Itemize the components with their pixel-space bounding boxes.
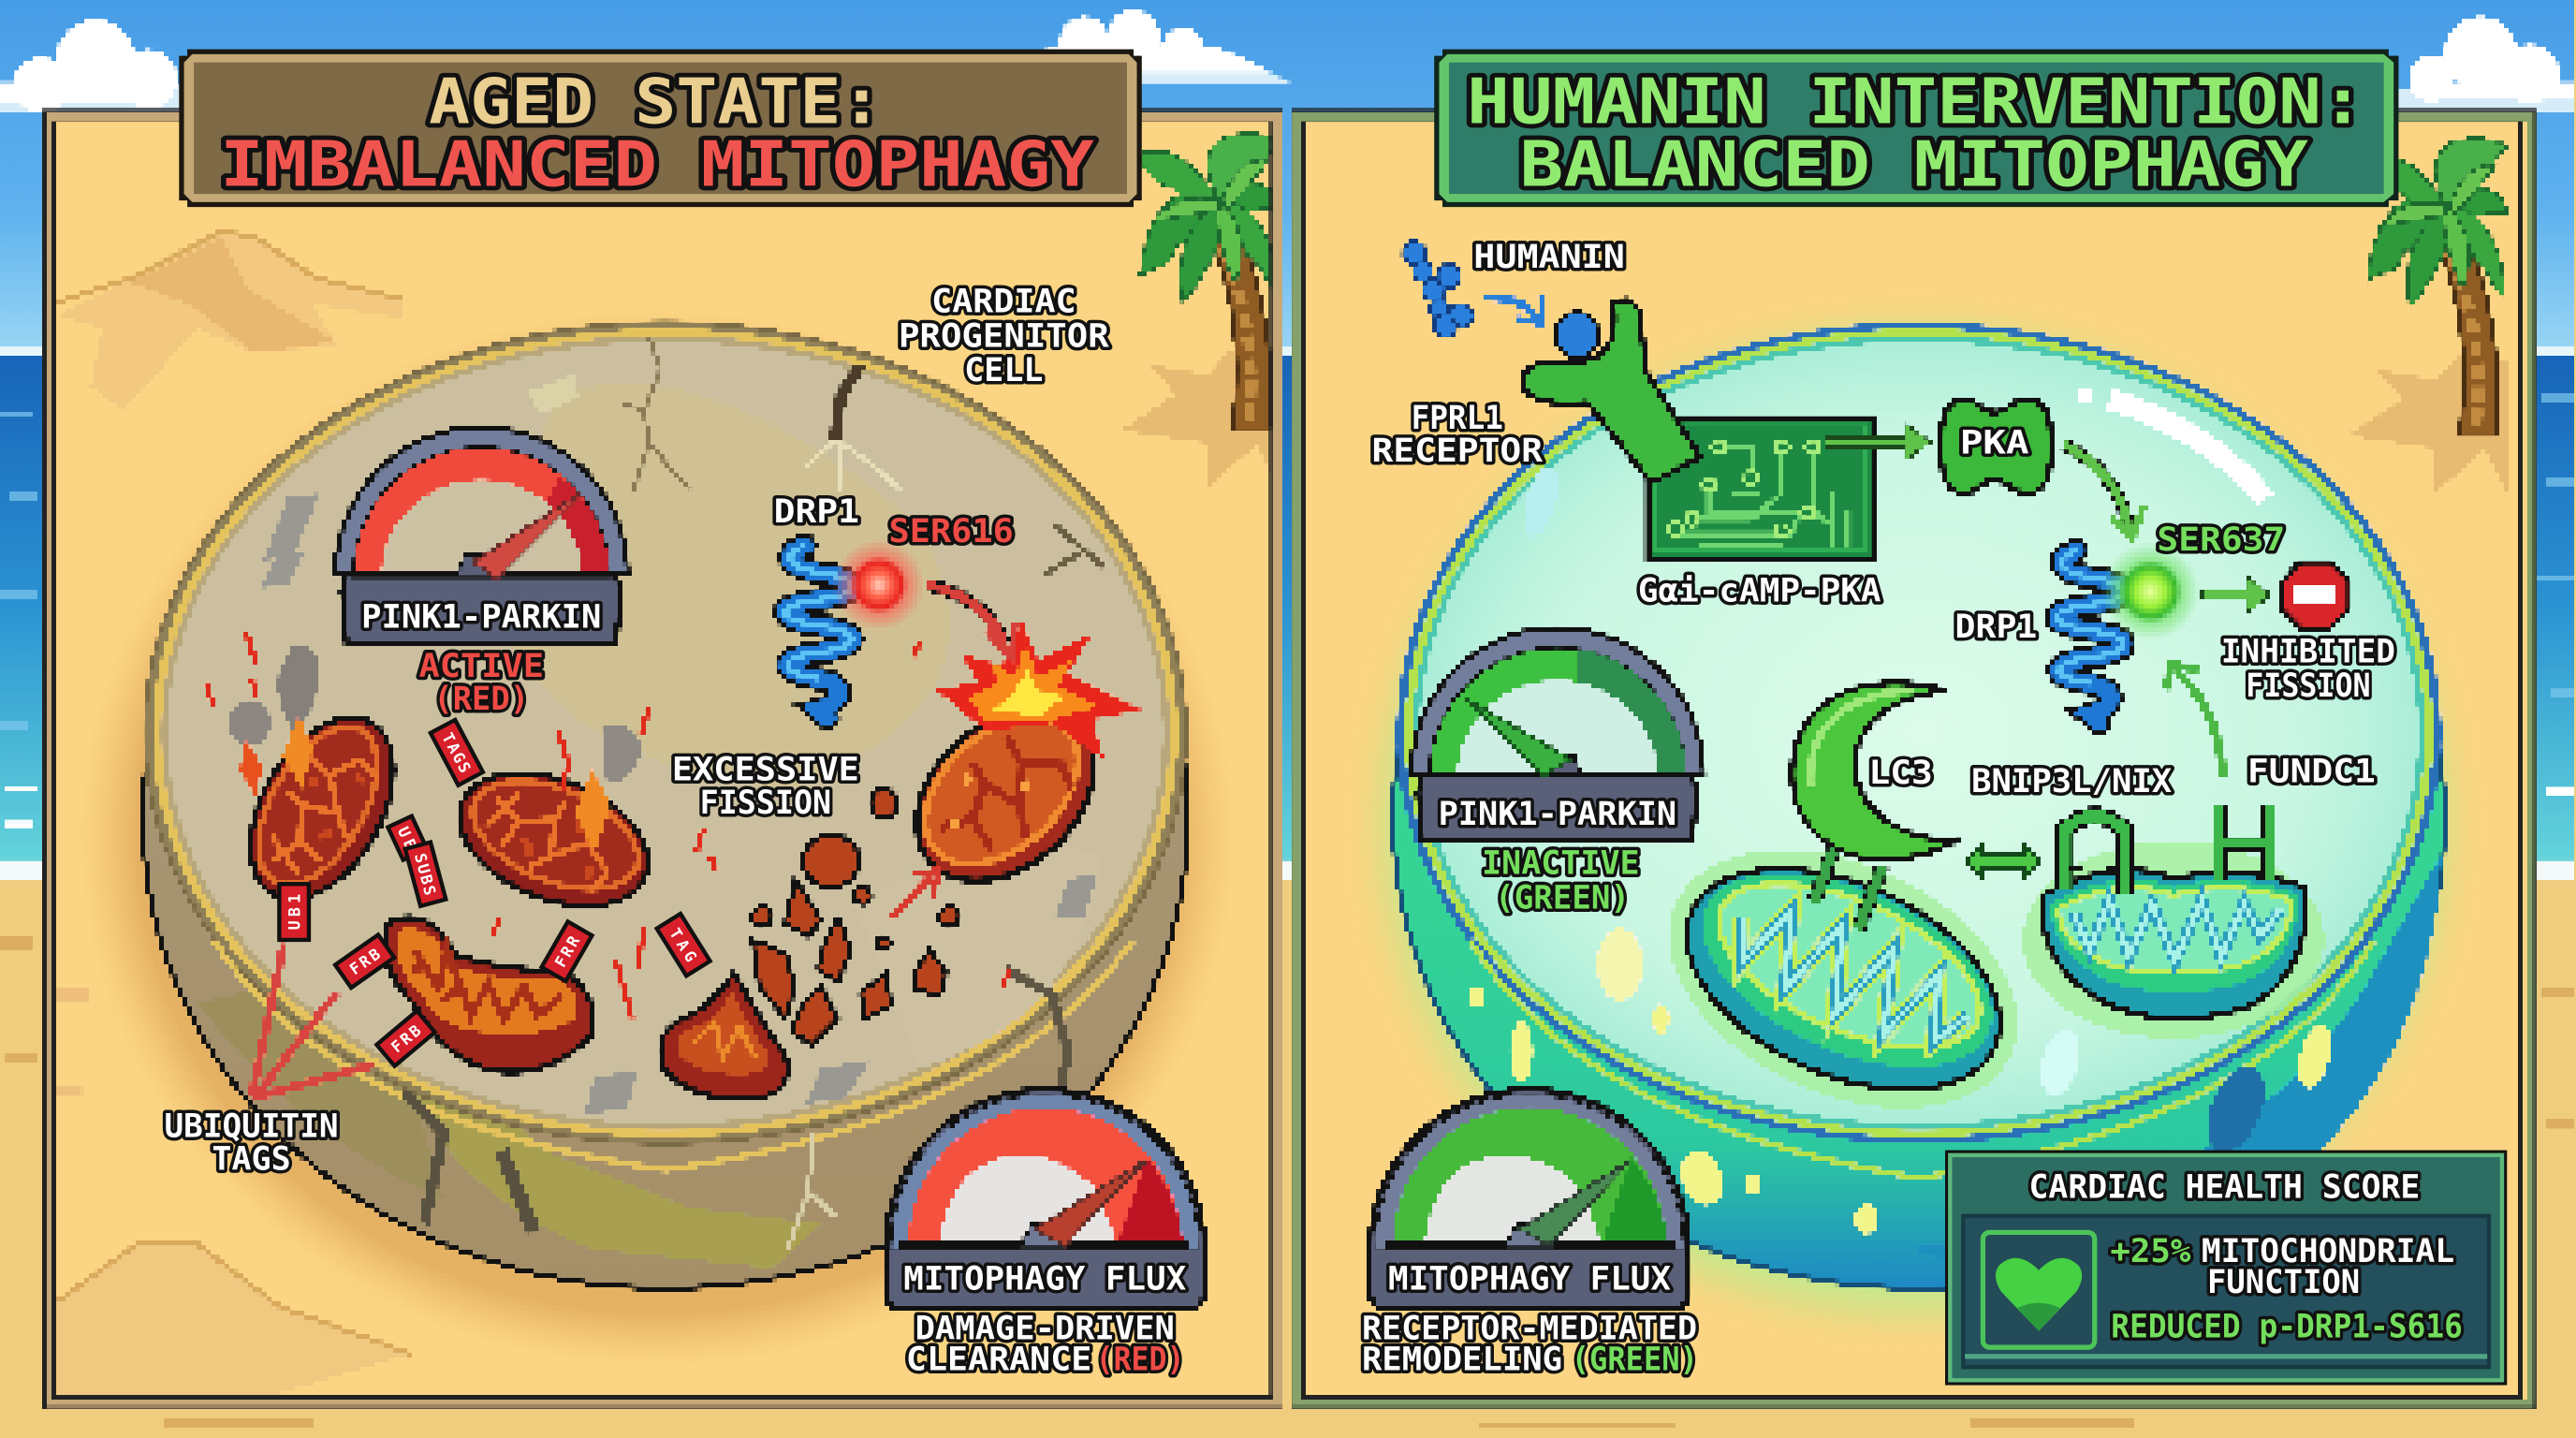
label: cardiac progenitor cell: PROGENITOR xyxy=(899,316,1110,355)
label: receptor-mediated remodeling: RECEPTOR-MEDIATED xyxy=(1362,1309,1697,1347)
label: damage-driven clearance xyxy=(906,1309,1184,1379)
ubiquitin tags: FRB xyxy=(346,945,384,978)
mitochondria: damaged xyxy=(222,675,1128,1099)
icon: FUNDC1 receptor xyxy=(2219,805,2269,881)
label: PINK1-Parkin right: PINK1-PARKIN xyxy=(1439,795,1676,833)
cardiac progenitor cell disc xyxy=(143,322,1188,1288)
label: cardiac progenitor cell xyxy=(899,282,1110,389)
panel: humanin intervention xyxy=(1293,111,2535,1408)
icon: humanin peptide xyxy=(1403,242,1473,337)
arrow: FUNDC1 to DRP1 xyxy=(2165,664,2223,775)
cracks xyxy=(404,337,1104,1249)
label: inhibited fission: FISSION xyxy=(2246,667,2371,705)
icon: LC3 crescent xyxy=(1793,682,1962,930)
smoke and flames xyxy=(205,633,1010,1019)
label: inactive green xyxy=(1482,844,1640,917)
icon: DRP1 helix xyxy=(2056,550,2124,723)
mitochondrion: LC3 bound xyxy=(1629,800,2058,1159)
stat: reduced p-DRP1-S616: REDUCED p-DRP1-S616 xyxy=(2111,1308,2463,1346)
label: ubiquitin tags: TAGS xyxy=(212,1140,291,1179)
arrow: humanin to receptor xyxy=(1486,296,1543,324)
label: FPRL1 receptor: FPRL1 xyxy=(1412,399,1503,437)
label: active red: ACTIVE xyxy=(419,647,544,685)
palm tree xyxy=(1120,134,1280,490)
label: excessive fission: FISSION xyxy=(700,784,831,822)
arrow: PKA to SER637 xyxy=(2063,446,2144,537)
disc shadow on sand xyxy=(79,309,1236,1367)
gauge: PINK1-Parkin inactive xyxy=(1412,627,1704,842)
ubiquitin tags: TAGS xyxy=(438,730,474,776)
label: humanin: HUMANIN xyxy=(1473,238,1625,276)
sand dunes xyxy=(54,231,411,1393)
label: damage-driven clearance: (RED) xyxy=(1096,1341,1184,1379)
icon: SER637 phosphorylation glow xyxy=(2101,542,2200,640)
icon: circuit board G-protein xyxy=(1647,418,1873,559)
label: cardiac progenitor cell: CELL xyxy=(964,351,1043,389)
mitochondrial fragments xyxy=(753,788,959,1045)
label: mitophagy flux left: MITOPHAGY FLUX xyxy=(903,1260,1186,1299)
palm tree xyxy=(2348,139,2507,494)
label: PKA: PKA xyxy=(1960,423,2029,462)
ubiquitin tags: TAG xyxy=(666,925,700,965)
panel background sand xyxy=(1293,113,2535,1406)
label: DRP1 left: DRP1 xyxy=(774,492,859,531)
label: inhibited fission: INHIBITED xyxy=(2221,632,2395,670)
label: ubiquitin tags xyxy=(165,1108,339,1179)
label: FPRL1 receptor xyxy=(1372,399,1544,470)
label: excessive fission: EXCESSIVE xyxy=(672,751,859,789)
stat: mitochondrial function: FUNCTION xyxy=(2207,1263,2360,1301)
panel frame xyxy=(1293,111,2535,1408)
icon: green heart xyxy=(1983,1232,2095,1347)
label: FPRL1 receptor: RECEPTOR xyxy=(1372,432,1544,470)
panel: aged state xyxy=(46,111,1281,1408)
icon: DRP1 helix xyxy=(785,546,853,718)
ubiquitin tags: SUBS xyxy=(411,851,439,897)
label: inactive green: (GREEN) xyxy=(1495,879,1630,917)
label: PINK1-Parkin left: PINK1-PARKIN xyxy=(361,597,601,636)
label: DRP1 right: DRP1 xyxy=(1955,608,2037,646)
label: BNIP3L/NIX: BNIP3L/NIX xyxy=(1971,762,2172,800)
label: receptor-mediated remodeling xyxy=(1362,1309,1698,1379)
title banner: humanin intervention: HUMANIN INTERVENTION: xyxy=(1467,66,2364,139)
label: LC3: LC3 xyxy=(1868,754,1933,792)
title banner: aged state: IMBALANCED MITOPHAGY xyxy=(220,127,1094,200)
arrow: LC3 receptor exchange xyxy=(1965,844,2042,877)
label: excessive fission xyxy=(672,751,859,822)
ubiquitin tags: FRR xyxy=(551,932,584,970)
icon: stop sign xyxy=(2282,562,2349,627)
icon: PKA kinase xyxy=(1941,399,2051,493)
icon: humanin bound ball xyxy=(1556,312,1599,359)
arrow: fragments burst xyxy=(890,871,938,918)
arrow: SER637 to inhibited fission xyxy=(2202,577,2271,613)
gauge: PINK1-Parkin active xyxy=(335,427,627,644)
title banner: humanin intervention xyxy=(1434,50,2398,207)
stat: mitochondrial function: MITOCHONDRIAL xyxy=(2202,1232,2454,1270)
label: receptor-mediated remodeling: (GREEN) xyxy=(1572,1341,1698,1379)
arrow shaft: board to PKA xyxy=(1823,439,1919,446)
explosion burst xyxy=(936,621,1142,759)
label: active red xyxy=(419,647,544,718)
title banner: aged state xyxy=(179,50,1142,207)
label: receptor-mediated remodeling: REMODELING xyxy=(1362,1341,1562,1379)
gauge: mitophagy flux damage xyxy=(886,1090,1204,1310)
label: damage-driven clearance: DAMAGE-DRIVEN xyxy=(915,1309,1175,1347)
ubiquitin tags: UB xyxy=(394,824,419,853)
arrow: DRP1 to fission xyxy=(927,585,1016,657)
arrow head: board to PKA xyxy=(1825,424,1930,460)
label: inhibited fission xyxy=(2221,632,2395,705)
label: SER616: SER616 xyxy=(889,512,1014,550)
title banner: humanin intervention: BALANCED MITOPHAGY xyxy=(1519,127,2308,200)
gauge: mitophagy flux remodeling xyxy=(1370,1090,1689,1310)
panel background sand xyxy=(48,113,1281,1406)
label: FUNDC1: FUNDC1 xyxy=(2247,752,2376,790)
heading: cardiac health score: CARDIAC HEALTH SCORE xyxy=(2029,1167,2420,1206)
stat: mitochondrial function: +25% xyxy=(2110,1232,2190,1270)
icon: SER616 phosphorylation glow xyxy=(833,539,925,631)
ubiquitin tags: UB1 xyxy=(285,894,303,930)
label: damage-driven clearance: CLEARANCE xyxy=(906,1341,1091,1379)
title banner: aged state: AGED STATE: xyxy=(429,66,882,139)
stat: mitochondrial function xyxy=(2110,1232,2454,1301)
icon: FPRL1 receptor xyxy=(1523,300,1701,483)
arrows: ubiquitin tags callout xyxy=(252,943,373,1097)
mitochondrion: receptor bound xyxy=(2023,842,2324,1038)
label: active red: (RED) xyxy=(433,680,529,718)
cell glow on sand xyxy=(1339,287,2489,1356)
panel: cardiac health score xyxy=(1947,1152,2506,1384)
label: G-alpha-i cAMP PKA: Gαi-cAMP-PKA xyxy=(1638,571,1881,609)
label: SER637: SER637 xyxy=(2157,521,2285,559)
ubiquitin tags xyxy=(279,720,710,1066)
label: mitophagy flux right: MITOPHAGY FLUX xyxy=(1388,1260,1671,1299)
healthy cell xyxy=(1393,322,2445,1288)
ubiquitin tags: FRB xyxy=(388,1021,424,1056)
icon: BNIP3L/NIX receptor arch xyxy=(2065,815,2124,896)
panel frame xyxy=(46,111,1281,1408)
label: cardiac progenitor cell: CARDIAC xyxy=(931,282,1076,320)
label: inactive green: INACTIVE xyxy=(1482,844,1640,883)
label: ubiquitin tags: UBIQUITIN xyxy=(165,1108,339,1146)
